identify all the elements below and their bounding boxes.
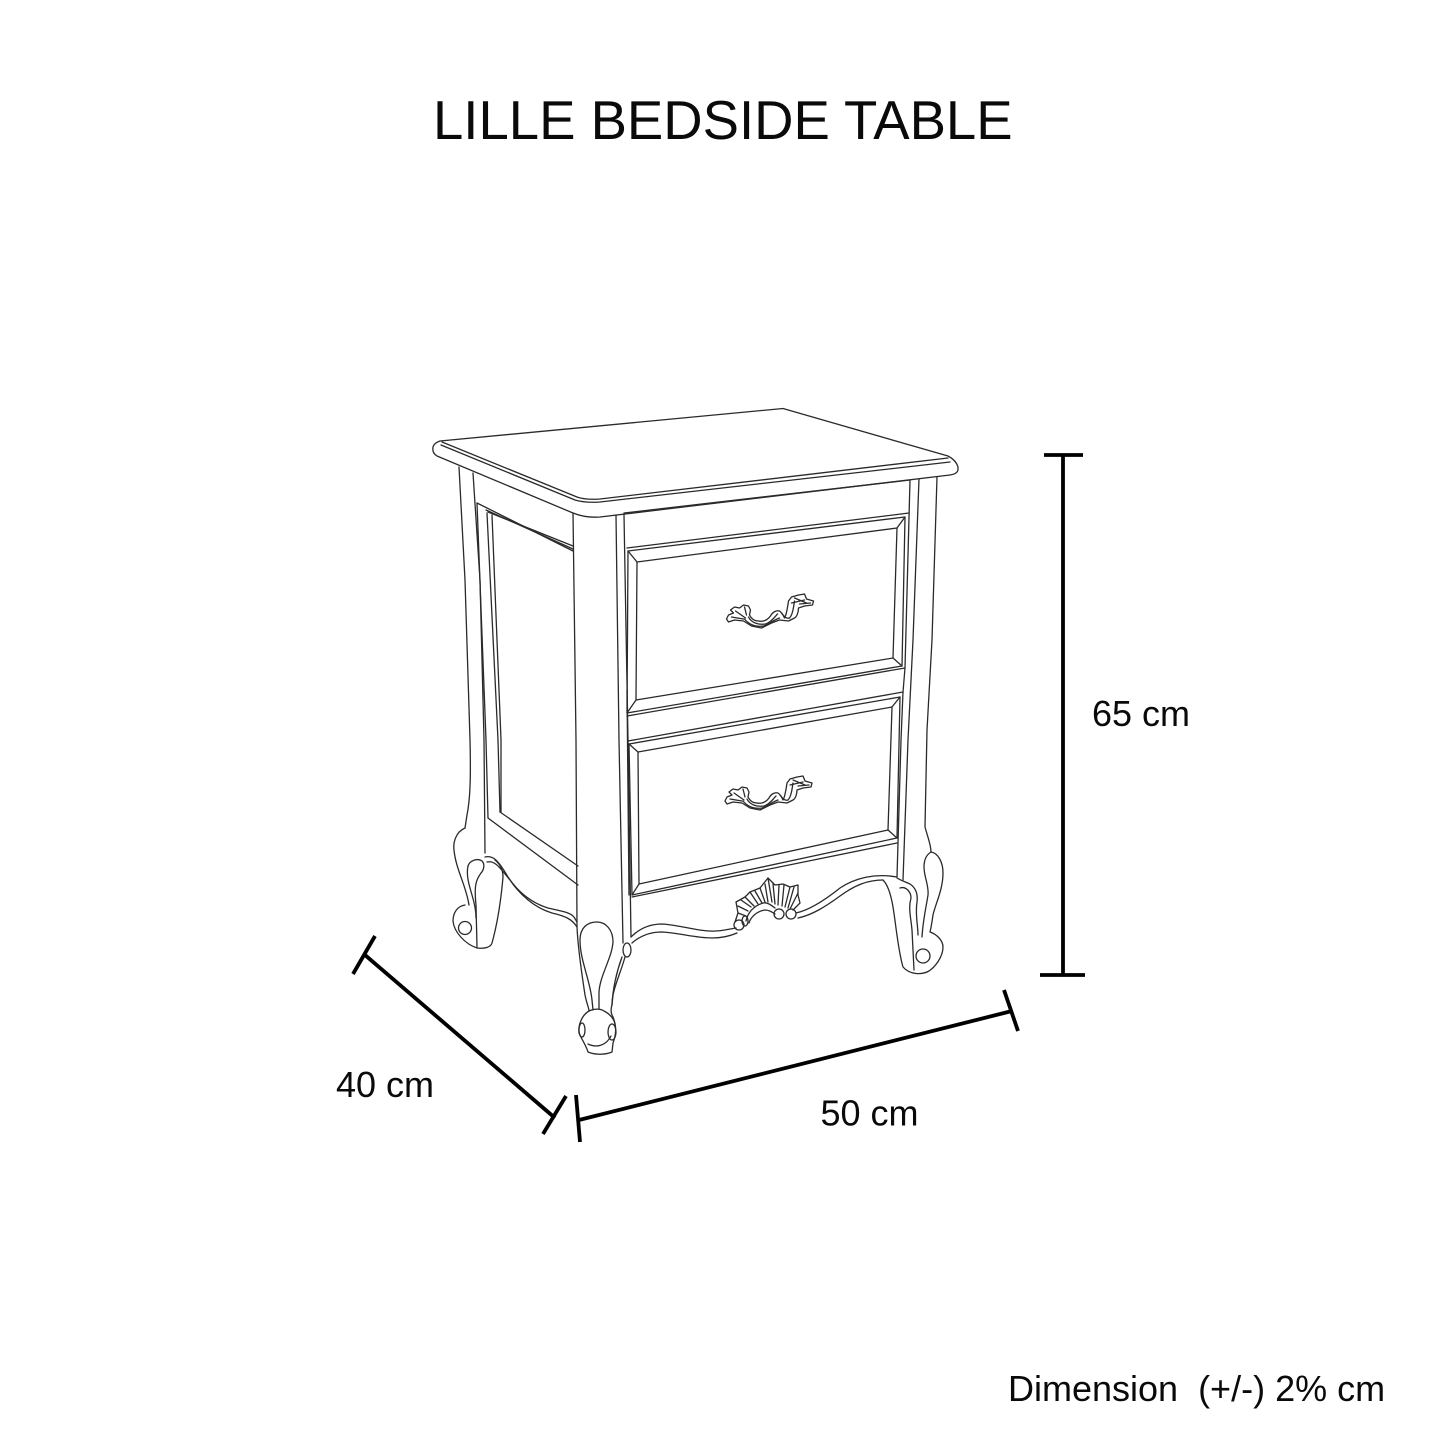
width dimension line	[576, 990, 1018, 1142]
tolerance note: Dimension (+/-) 2% cm	[1008, 1368, 1385, 1409]
lower drawer handle	[725, 776, 812, 810]
depth dimension line	[353, 936, 566, 1134]
side panel	[477, 503, 578, 885]
lower drawer	[628, 692, 903, 897]
upper drawer	[627, 513, 909, 716]
side apron	[485, 857, 577, 927]
front apron	[631, 876, 897, 943]
height dimension line	[1040, 455, 1085, 975]
title: LILLE BEDSIDE TABLE	[433, 90, 1013, 151]
height label: 65 cm	[1092, 693, 1190, 734]
front rail and posts	[624, 477, 937, 937]
table top	[433, 408, 958, 517]
width label: 50 cm	[820, 1092, 919, 1134]
back left leg	[453, 467, 503, 948]
depth label: 40 cm	[336, 1064, 434, 1105]
bedside table line drawing	[433, 408, 958, 1054]
front right leg	[883, 852, 943, 974]
front left leg	[573, 513, 631, 1054]
carved shell ornament	[734, 878, 800, 930]
upper drawer handle	[726, 594, 814, 628]
